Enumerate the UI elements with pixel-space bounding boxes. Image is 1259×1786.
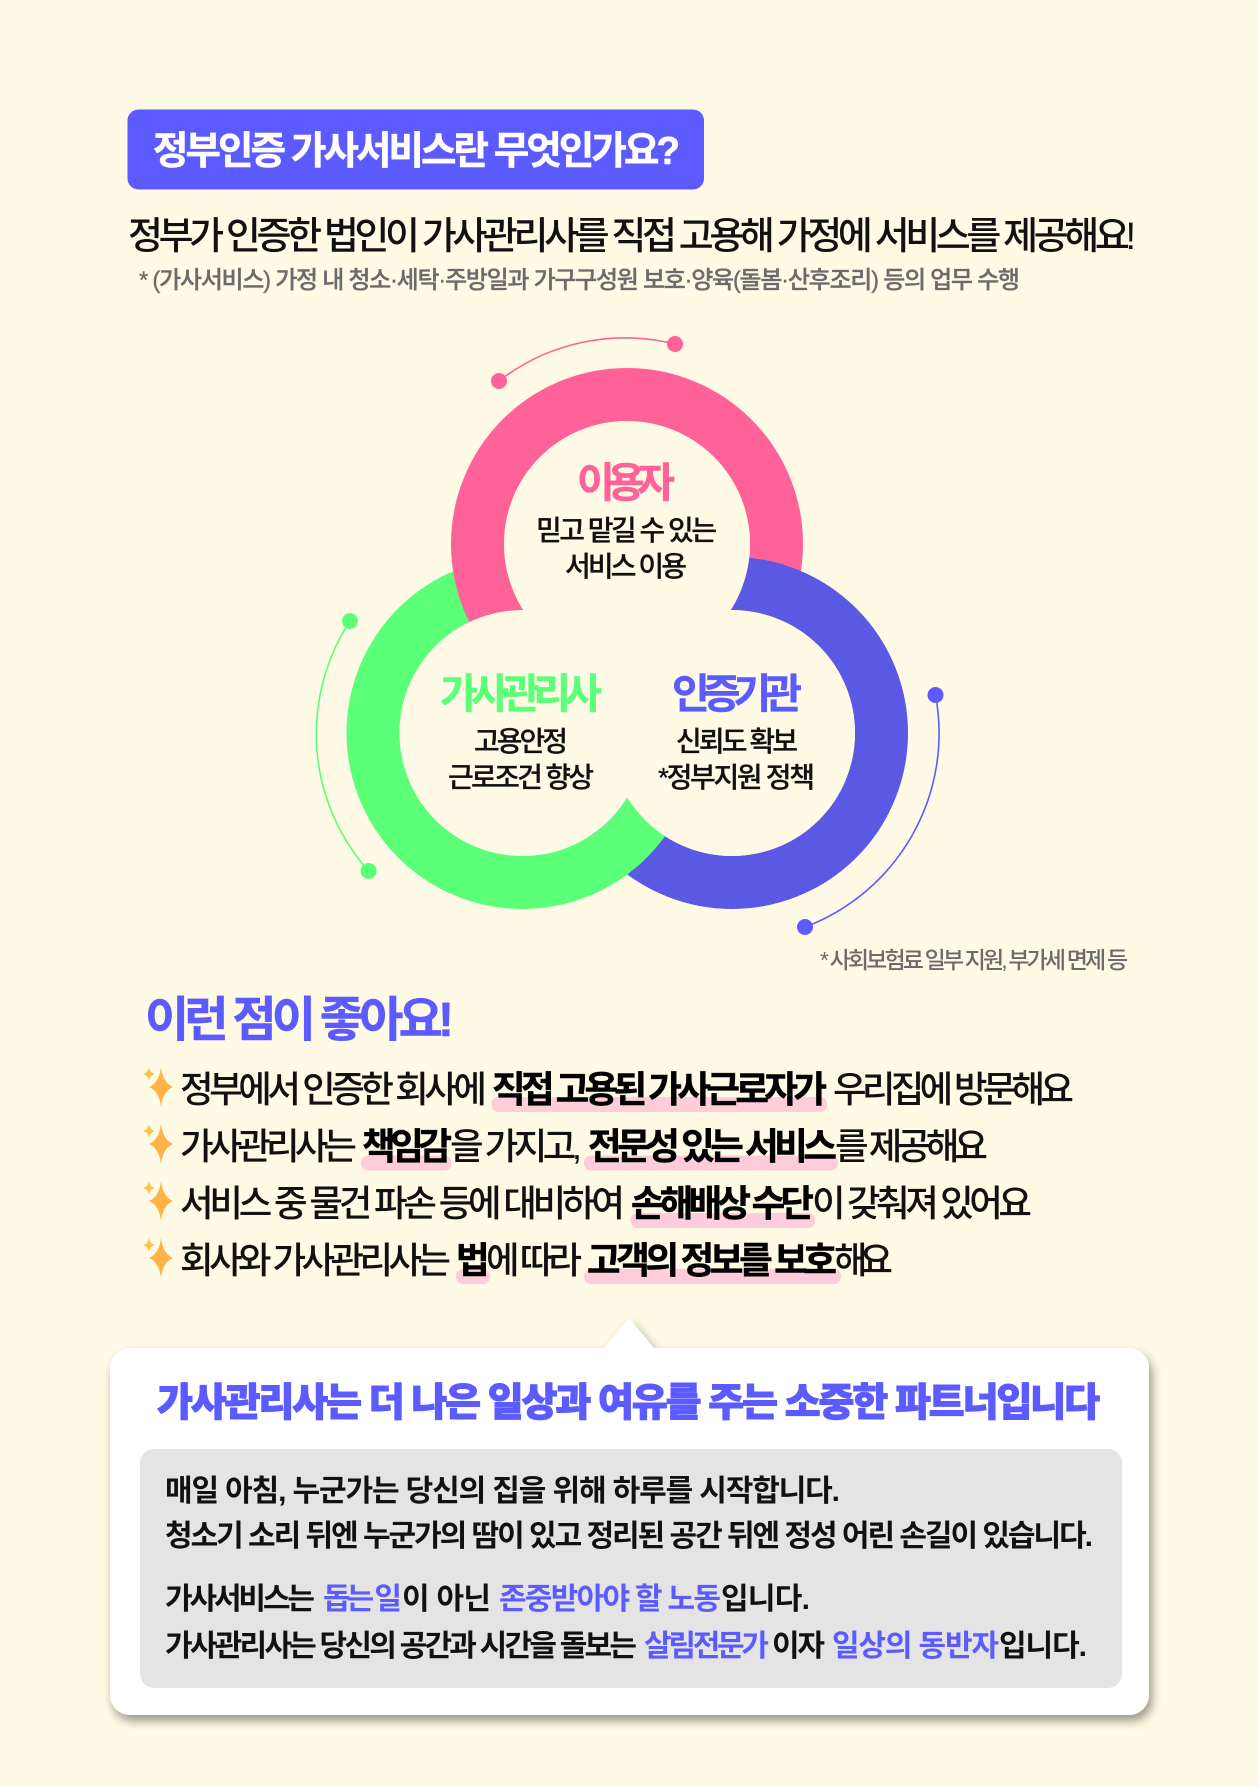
message paragraph 1: 매일 아침, 누군가는 당신의 집을 위해 하루를 시작합니다. bbox=[165, 1475, 840, 1508]
message paragraph 1 bbox=[165, 1475, 1093, 1553]
benefit 3 bbox=[143, 1181, 1032, 1228]
benefit 2: 전문성 있는 서비스 bbox=[588, 1126, 837, 1167]
label: certified agency: 인증기관 bbox=[672, 671, 802, 717]
benefit 2: 를 제공해요 bbox=[835, 1126, 988, 1167]
message paragraph 1: 청소기 소리 뒤엔 누군가의 땀이 있고 정리된 공간 뒤엔 정성 어린 손길이 있습니다. bbox=[165, 1520, 1093, 1553]
benefit 3: 서비스 중 물건 파손 등에 대비하여 bbox=[180, 1183, 625, 1224]
subtitle: 정부가 인증한 법인이 가사관리사를 직접 고용해 가정에 서비스를 제공해요! bbox=[128, 216, 1136, 258]
benefit 1 bbox=[143, 1067, 1074, 1112]
message paragraph 2: 입니다. bbox=[721, 1583, 810, 1616]
benefit 4: 고객의 정보를 보호 bbox=[587, 1240, 837, 1281]
card heading: 가사관리사는 더 나은 일상과 여유를 주는 소중한 파트너입니다 bbox=[157, 1382, 1100, 1425]
message paragraph 2: 이 아닌 bbox=[402, 1583, 491, 1616]
label: user: 믿고 맡길 수 있는 bbox=[536, 515, 717, 546]
message paragraph 2: 일상의 동반자 bbox=[832, 1630, 999, 1663]
page canvas bbox=[106, 110, 1158, 1728]
benefit 4: 회사와 가사관리사는 bbox=[180, 1240, 451, 1281]
ring: green bbox=[373, 584, 672, 882]
message paragraph 2: 존중받아야 할 노동 bbox=[499, 1583, 721, 1616]
title badge: 정부인증 가사서비스란 무엇인가요? bbox=[153, 130, 680, 173]
label: housekeeper: 가사관리사 bbox=[440, 671, 602, 717]
benefit 2: 을 가지고, bbox=[450, 1126, 582, 1167]
benefit 4: 법 bbox=[456, 1240, 490, 1281]
callout card bbox=[110, 1318, 1149, 1715]
label: user: 서비스 이용 bbox=[565, 551, 687, 582]
footnote: service definition: * (가사서비스) 가정 내 청소·세탁·주방일과 가구구성원 보호·양육(돌봄·산후조리) 등의 업무 수행 bbox=[139, 267, 1020, 294]
title badge bbox=[128, 110, 704, 190]
benefit 4: 해요 bbox=[834, 1240, 893, 1281]
label: housekeeper: 고용안정 bbox=[474, 726, 568, 757]
ring: blue bbox=[582, 584, 882, 882]
diagram: three interlocking rings bbox=[316, 336, 944, 935]
benefit 1: 정부에서 인증한 회사에 bbox=[180, 1069, 487, 1110]
message paragraph 2 bbox=[165, 1583, 1087, 1663]
benefit 3: 손해배상 수단 bbox=[631, 1183, 814, 1224]
ring: green overlap over blue bbox=[590, 798, 665, 896]
label: housekeeper bbox=[440, 671, 602, 793]
benefits list bbox=[143, 1067, 1074, 1284]
label: certified agency: 신뢰도 확보 bbox=[676, 726, 798, 757]
label: certified agency bbox=[658, 671, 815, 793]
label: housekeeper: 근로조건 향상 bbox=[448, 762, 594, 793]
benefit 1: 우리집에 방문해요 bbox=[833, 1069, 1074, 1110]
ring: pink bbox=[478, 394, 776, 694]
heading: benefits: 이런 점이 좋아요! bbox=[145, 994, 454, 1047]
benefit 2: 책임감 bbox=[362, 1126, 452, 1167]
label: certified agency: *정부지원 정책 bbox=[658, 762, 815, 793]
message paragraph 2: 살림전문가 bbox=[644, 1630, 769, 1663]
footnote: government support: * 사회보험료 일부 지원, 부가세 면제 등 bbox=[820, 947, 1128, 973]
message paragraph 2: 돕는 일 bbox=[323, 1583, 402, 1616]
benefit 1: 직접 고용된 가사근로자가 bbox=[492, 1069, 827, 1110]
message paragraph 2: 이자 bbox=[772, 1630, 825, 1663]
message paragraph 2: 가사서비스는 bbox=[165, 1583, 315, 1616]
label: user: 이용자 bbox=[577, 460, 675, 506]
inner area bbox=[400, 421, 855, 856]
orbit: blue bbox=[797, 687, 944, 935]
benefit 2 bbox=[143, 1124, 988, 1170]
benefit 3: 이 갖춰져 있어요 bbox=[812, 1183, 1032, 1224]
benefit 4: 에 따라 bbox=[486, 1240, 582, 1281]
speech bubble bbox=[110, 1318, 1149, 1715]
label: user bbox=[536, 460, 717, 582]
benefit 4 bbox=[143, 1238, 893, 1284]
message paragraph 2: 가사관리사는 당신의 공간과 시간을 돌보는 bbox=[165, 1630, 637, 1663]
orbit: green bbox=[316, 613, 377, 879]
orbit: pink bbox=[491, 336, 683, 389]
benefit 2: 가사관리사는 bbox=[180, 1126, 357, 1167]
grey message panel bbox=[140, 1449, 1122, 1688]
message paragraph 2: 입니다. bbox=[999, 1630, 1087, 1663]
